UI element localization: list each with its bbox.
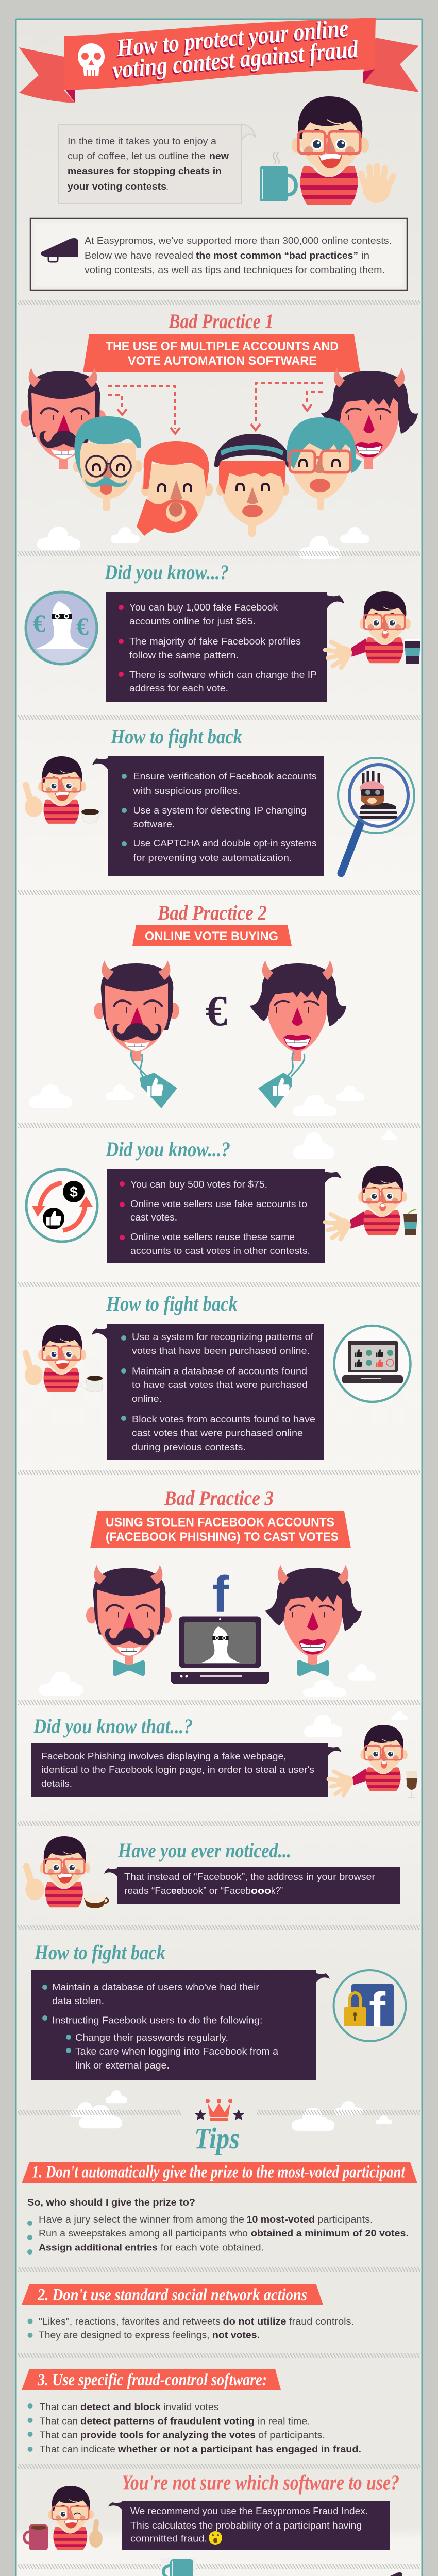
tip 1 text <box>27 2197 409 2255</box>
bullet text: Instructing Facebook users to do the following: <box>52 2014 262 2026</box>
illustration: euro sign: € <box>206 987 227 1035</box>
tip 1 text: for each vote obtained. <box>161 2242 264 2252</box>
panel: fraud index recommendation: This calculates the probability of a participant having <box>130 2520 362 2531</box>
icon: tilted coffee mug <box>161 2558 196 2576</box>
panel: did you know that: Facebook Phishing involves displaying a fake webpage, <box>41 1751 287 1761</box>
icon: masked profile with euros <box>26 592 97 664</box>
heading: did you know that: Did you know that...? <box>33 1715 193 1738</box>
cloud decorations <box>293 1130 397 1159</box>
bullets <box>27 2221 32 2255</box>
icon: megaphone <box>41 238 78 262</box>
cloud decorations <box>304 1711 408 1737</box>
icon: masked profile with euros: € <box>76 613 89 640</box>
callout text: Below we have revealed <box>85 250 193 261</box>
tip 2 text: fraud controls. <box>289 2316 354 2327</box>
bullets <box>119 605 124 677</box>
heading: how to fight back 2: How to fight back <box>106 1292 238 1315</box>
illustration: surprised guy with iced coffee <box>325 1166 417 1239</box>
icon: emoji <box>209 2531 222 2545</box>
icon: laptop with masked profile <box>171 1617 269 1684</box>
banner: stolen accounts: USING STOLEN FACEBOOK ACCOUNTS <box>106 1516 334 1529</box>
bullet text: online. <box>132 1393 162 1404</box>
panel: fight back 1 <box>92 756 324 876</box>
panel: did you know 2 <box>107 1169 341 1263</box>
bullet text: Take care when logging into Facebook from a <box>75 2046 279 2057</box>
callout: about Easypromos <box>30 218 407 290</box>
illustration: red-haired bearded man <box>137 441 213 536</box>
banner: multiple accounts <box>83 334 360 372</box>
icon: like tag <box>258 1073 292 1108</box>
icon: bow tie <box>297 1660 329 1676</box>
bullet text: accounts online for just $65. <box>129 616 256 626</box>
panel: have you ever noticed: book” or “Faceb <box>182 1885 251 1896</box>
icon: magnifier over burglar <box>338 758 414 873</box>
heading: Did you know 2: Did you know...? <box>105 1138 230 1161</box>
panel: did you know that <box>31 1743 341 1797</box>
bullet text: Block votes from accounts found to have <box>132 1414 315 1425</box>
bullet text: link or external page. <box>75 2060 170 2071</box>
illustration: devil woman with bow tie <box>265 1565 362 1676</box>
tip 3 text: That can indicate <box>39 2444 115 2454</box>
callout text: in <box>361 250 369 261</box>
illustration: teal-haired man <box>73 416 142 511</box>
tip 3 text: That can <box>39 2401 78 2412</box>
title ribbon <box>19 14 419 103</box>
panel: have you ever noticed: k?” <box>271 1885 283 1896</box>
tip 3 text: That can <box>39 2415 78 2427</box>
icon: teal mug <box>260 152 296 201</box>
heading: how to fight back 1: How to fight back <box>110 725 242 748</box>
banner: online vote buying: ONLINE VOTE BUYING <box>145 929 278 943</box>
cloud decorations <box>70 2090 392 2131</box>
icon: iced coffee <box>403 1209 417 1235</box>
heading: Bad Practice 2: Bad Practice 2 <box>157 901 267 924</box>
callout text: the most common “bad practices” <box>196 250 358 261</box>
illustration: devil man with bow tie <box>86 1565 172 1676</box>
panel: fight back 3 <box>31 1970 330 2080</box>
bullet text: data stolen. <box>52 1995 104 2006</box>
tip 3 text: That can <box>39 2429 78 2440</box>
heading: how to fight back 3: How to fight back <box>34 1941 165 1964</box>
tip 2 text: do not utilize <box>223 2316 287 2327</box>
icon: takeaway cup <box>405 639 420 664</box>
heading: have you ever noticed: Have you ever noticed... <box>117 1839 291 1862</box>
callout text <box>85 235 392 275</box>
tip 3 text: provide tools for analyzing the votes <box>80 2429 256 2440</box>
bullet text: accounts to cast votes in other contests. <box>130 1245 310 1256</box>
bullet text: The majority of fake Facebook profiles <box>129 636 301 647</box>
tip 3 text: detect patterns of fraudulent voting <box>80 2415 255 2427</box>
icon: cappuccino cup <box>84 1892 108 1908</box>
heading: Bad Practice 3: Bad Practice 3 <box>164 1486 274 1510</box>
panel: did you know 1 <box>106 592 344 702</box>
panel: have you ever noticed: ooo <box>251 1885 271 1896</box>
icon: masked profile with euros: € <box>33 610 45 637</box>
bullets <box>28 2403 33 2452</box>
bullet text: to have cast votes that were purchased <box>132 1379 308 1390</box>
bullet text: cast votes. <box>130 1212 177 1223</box>
tip 3 text: of participants. <box>258 2429 325 2440</box>
tip 3 text: whether or not a participant has engaged in fraud. <box>117 2444 361 2454</box>
intro speech bubble: your voting contests <box>68 181 166 192</box>
bullet text: address for each vote. <box>129 683 228 693</box>
title text: How to protect your online <box>115 14 349 62</box>
bullet text: There is software which can change the IP <box>129 669 317 680</box>
bullet text: Change their passwords regularly. <box>75 2032 228 2043</box>
bullet text: for preventing vote automatization. <box>133 852 292 863</box>
illustration: devil man <box>21 368 106 469</box>
closing message <box>24 2558 413 2576</box>
icon: skull <box>78 43 105 76</box>
panel: did you know that: details. <box>41 1778 72 1789</box>
bullet text: follow the same pattern. <box>129 650 239 660</box>
bullet text: You can buy 1,000 fake Facebook <box>129 602 278 613</box>
tip 3 text: invalid votes <box>163 2401 218 2412</box>
icon: latte glass <box>406 1771 417 1798</box>
tip 1 text: obtained a minimum of 20 votes. <box>251 2228 409 2239</box>
bullet text: Online vote sellers reuse these same <box>130 1231 295 1242</box>
tip 2 text: "Likes", reactions, favorites and retweets <box>39 2316 221 2327</box>
cloud decorations <box>39 1664 376 1697</box>
icon: crown with stars <box>195 2099 244 2121</box>
bullet text: Use CAPTCHA and double opt-in systems <box>133 838 316 849</box>
intro speech bubble <box>58 124 256 204</box>
title text: voting contest against fraud <box>110 37 359 86</box>
illustration: devil woman with price tag <box>249 960 346 1108</box>
panel: have you ever noticed <box>104 1867 400 1904</box>
tip 2 text: not votes. <box>212 2330 260 2340</box>
bullet text <box>132 1331 315 1452</box>
title text <box>110 14 360 86</box>
bullet text <box>129 602 317 693</box>
tip 1 text: So, who should I give the prize to? <box>27 2197 195 2208</box>
panel: have you ever noticed: ee <box>171 1885 182 1896</box>
intro speech bubble: cup of coffee, let us outline the <box>68 150 206 161</box>
icon: facebook with padlock: f <box>369 1982 386 2038</box>
tip 1 text: Assign additional entries <box>39 2242 158 2252</box>
icon: facebook f: f <box>212 1566 229 1622</box>
panel: fraud index recommendation <box>108 2501 390 2550</box>
banner: stolen accounts <box>90 1511 351 1548</box>
icon: hand with finger up <box>89 2522 103 2548</box>
bullets <box>42 1985 71 2053</box>
cloud decorations <box>29 1084 364 1116</box>
bullet text: with suspicious profiles. <box>132 785 240 796</box>
bullet text: during previous contests. <box>132 1442 246 1452</box>
dashed arrows <box>108 383 323 434</box>
icon: coffee mug <box>81 1376 103 1392</box>
panel: did you know that: identical to the Facebook login page, in order to steal a user's <box>41 1764 314 1775</box>
banner: stolen accounts: (FACEBOOK PHISHING) TO CAST VOTES <box>106 1530 339 1544</box>
bullet text: Maintain a database of accounts found <box>132 1365 307 1377</box>
icon: laptop with votes <box>334 1326 410 1402</box>
intro speech bubble: measures for stopping cheats in <box>68 165 222 176</box>
illustration: surprised guy with latte glass <box>329 1725 417 1798</box>
bullets <box>122 774 127 846</box>
illustration: devil man with price tag <box>94 960 179 1108</box>
icon: facebook with padlock <box>334 1970 406 2041</box>
panel: fraud index recommendation: We recommend you use the Easypromos Fraud Index. <box>130 2505 368 2516</box>
panel: fraud index recommendation: committed fraud. <box>130 2533 207 2544</box>
callout text: voting contests, as well as tips and techniques for combating them. <box>85 264 385 275</box>
tip 1 text: Run a sweepstakes among all participants who <box>39 2228 248 2239</box>
icon: like tag <box>140 1073 177 1108</box>
tip 1 text: participants. <box>317 2214 373 2225</box>
heading: Bad Practice 1: Bad Practice 1 <box>168 310 274 333</box>
banner: multiple accounts: THE USE OF MULTIPLE ACCOUNTS AND <box>106 340 339 353</box>
title text: How to protect your online <box>114 16 348 63</box>
bullets <box>121 1335 126 1421</box>
bullet text <box>52 1981 279 2071</box>
tip 2 text <box>28 2316 354 2340</box>
banner: tip 3: 3. Use specific fraud-control software: <box>37 2370 267 2389</box>
bullet text: software. <box>133 819 175 829</box>
illustration: pointing guy with mug <box>25 1325 103 1392</box>
bullet text: Ensure verification of Facebook accounts <box>133 771 316 782</box>
cloud decorations <box>37 527 369 559</box>
bullet text: Use a system for recognizing patterns of <box>132 1331 314 1342</box>
tip 1 text: 10 most-voted <box>247 2214 315 2225</box>
intro speech bubble: . <box>166 181 169 192</box>
bullets <box>28 2319 33 2338</box>
panel: have you ever noticed: reads “Fac <box>124 1885 171 1896</box>
icon: money for likes cycle <box>26 1170 97 1242</box>
illustration: devil woman <box>321 368 418 469</box>
tip 2 text: They are designed to express feelings, <box>39 2330 209 2340</box>
tip 1 text: Have a jury select the winner from among the <box>39 2214 244 2225</box>
bullet text: Online vote sellers use fake accounts to <box>130 1198 307 1209</box>
panel: fight back 2 <box>92 1324 324 1460</box>
illustration: pointing guy with cappuccino <box>25 1836 108 1908</box>
panel: have you ever noticed: That instead of “Facebook”, the address in your browser <box>124 1871 375 1882</box>
tip 3 text: detect and block <box>80 2401 161 2412</box>
icon: pink mug <box>24 2524 48 2550</box>
illustration: pointing guy with coffee <box>25 756 102 824</box>
bullet text <box>130 1179 310 1256</box>
callout text: At Easypromos, we've supported more than 300,000 online contests. <box>85 235 392 246</box>
bullet text: cast votes that were purchased online <box>132 1427 303 1438</box>
bullet text: votes that have been purchased online. <box>132 1345 310 1356</box>
banner: online vote buying <box>132 925 292 946</box>
bullet text: Maintain a database of users who've had their <box>52 1981 259 1992</box>
title text: voting contest against fraud <box>111 35 360 84</box>
intro speech bubble: new <box>209 150 229 161</box>
bullet text: You can buy 500 votes for $75. <box>130 1179 267 1190</box>
icon: coffee cup <box>81 809 102 823</box>
bullet text <box>132 771 316 863</box>
heading: Did you know 1: Did you know...? <box>104 561 229 584</box>
illustration: guy with mug and waving hand <box>260 96 393 205</box>
icon: money for likes cycle: $ <box>70 1184 78 1200</box>
banner: tip 2: 2. Don't use standard social network actions <box>37 2285 307 2304</box>
logo: easypromos <box>365 2572 413 2576</box>
bullets <box>120 1181 125 1240</box>
illustration: teal-haired woman <box>287 417 362 510</box>
tip 3 text <box>28 2401 361 2454</box>
illustration: surprised guy with takeaway cup <box>325 591 420 668</box>
intro speech bubble: In the time it takes you to enjoy a <box>68 135 217 146</box>
tip 3 text: in real time. <box>258 2415 310 2427</box>
banner: multiple accounts: VOTE AUTOMATION SOFTWARE <box>128 354 317 368</box>
heading: tips: Tips <box>194 2122 240 2155</box>
bullet text: Use a system for detecting IP changing <box>133 805 306 816</box>
illustration: winking guy with mug <box>24 2486 103 2550</box>
illustration: woman with hat <box>214 434 291 537</box>
icon: bow tie <box>113 1660 145 1676</box>
